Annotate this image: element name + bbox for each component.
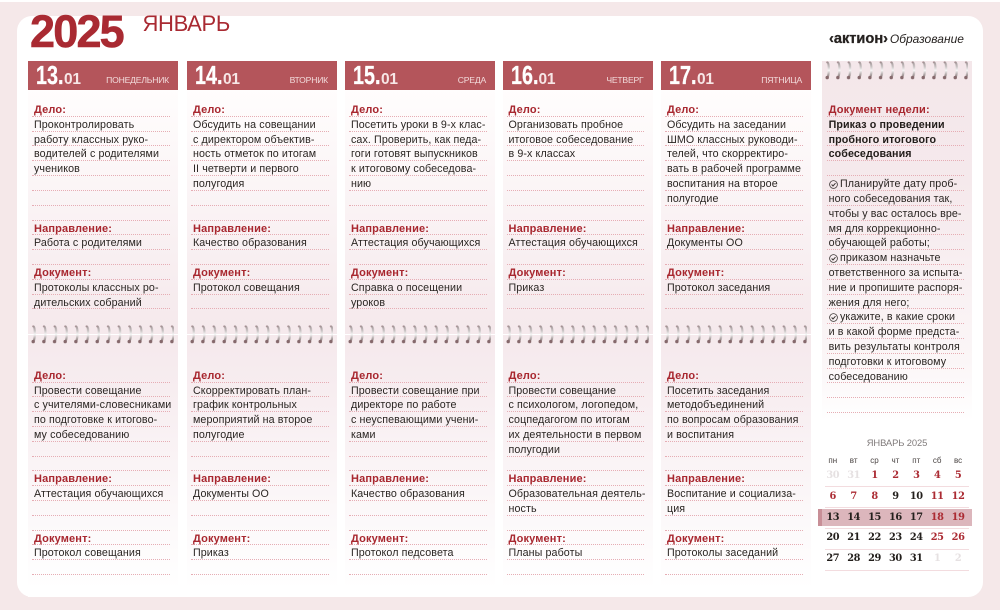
lower task card: Посетить заседания bbox=[667, 385, 769, 397]
calendar dates: 31 bbox=[910, 553, 923, 564]
upper task card: уроков bbox=[351, 297, 385, 309]
upper task card bbox=[32, 104, 170, 309]
lower task card: Направление: bbox=[351, 473, 429, 485]
calendar dates: 8 bbox=[871, 491, 878, 502]
calendar dates: 19 bbox=[952, 512, 964, 523]
upper task card: полугодие bbox=[667, 193, 718, 205]
upper task card: учеников bbox=[34, 163, 80, 175]
upper task card: сах. Проверить, как педа- bbox=[351, 134, 481, 146]
lower task card: методобъединений bbox=[667, 399, 764, 411]
lower task card: Документ: bbox=[34, 533, 91, 545]
calendar dates: 27 bbox=[826, 553, 839, 564]
calendar dates: 29 bbox=[868, 553, 881, 564]
date header: 13. bbox=[36, 60, 63, 90]
lower task card: мероприятий на второе bbox=[193, 414, 312, 426]
upper task card: Документ: bbox=[193, 267, 250, 279]
upper task card: телей, что скорректиро- bbox=[667, 148, 788, 160]
calendar title: ЯНВАРЬ 2025 bbox=[867, 437, 927, 448]
lower task card: по подготовке к итогово- bbox=[34, 414, 157, 426]
document of the week text: Приказ о проведении bbox=[829, 119, 945, 131]
calendar dates: 15 bbox=[868, 512, 881, 523]
calendar dates: 2 bbox=[892, 470, 899, 481]
lower task card: Провести совещание bbox=[34, 385, 142, 397]
calendar dates: 25 bbox=[931, 532, 944, 543]
weekday names: чт bbox=[891, 456, 899, 465]
upper task card: Документ: bbox=[667, 267, 724, 279]
document of the week text: обучающей работы; bbox=[829, 237, 930, 249]
upper task card: II четверти и первого bbox=[193, 163, 299, 175]
upper task card: в 9-х классах bbox=[508, 148, 575, 160]
lower task card bbox=[32, 370, 171, 575]
upper task card bbox=[349, 104, 487, 309]
ring binding bbox=[190, 325, 333, 344]
calendar dates: 3 bbox=[913, 470, 920, 481]
upper task card: вать в рабочей программе bbox=[667, 163, 801, 175]
document of the week text: чтобы у вас осталось вре- bbox=[829, 208, 962, 220]
upper task card: Дело: bbox=[508, 104, 541, 116]
calendar dates: 10 bbox=[910, 491, 923, 502]
ring binding bbox=[664, 325, 807, 344]
lower task card: Провести совещание при bbox=[351, 385, 480, 397]
upper task card: итоговое собеседование bbox=[508, 134, 633, 146]
upper task card: Дело: bbox=[193, 104, 225, 116]
upper task card: Посетить уроки в 9-х клас- bbox=[351, 119, 486, 131]
lower task card: Направление: bbox=[193, 473, 271, 485]
panel: document of the week bbox=[822, 61, 972, 421]
document of the week text: мя для коррекционно- bbox=[829, 222, 941, 234]
lower task card: Направление: bbox=[34, 473, 112, 485]
date header: 01 bbox=[223, 71, 240, 88]
upper task card: водителей с родителями bbox=[34, 148, 159, 160]
document of the week text bbox=[827, 104, 964, 413]
upper task card: Направление: bbox=[351, 222, 429, 234]
upper task card: Направление: bbox=[34, 222, 112, 234]
date header: 14. bbox=[195, 60, 222, 90]
document of the week text: и в какой форме предста- bbox=[829, 326, 959, 338]
date header: 01 bbox=[64, 71, 81, 88]
upper task card: работу классных руко- bbox=[34, 134, 148, 146]
lower task card: Протоколы заседаний bbox=[667, 547, 778, 559]
lower task card: полугодие bbox=[193, 429, 244, 441]
lower task card: му собеседованию bbox=[34, 429, 129, 441]
lower task card: Дело: bbox=[351, 370, 383, 382]
calendar dates: 18 bbox=[931, 512, 944, 523]
lower task card: Дело: bbox=[34, 370, 66, 382]
document of the week text: собеседования bbox=[829, 148, 912, 160]
date header bbox=[502, 61, 652, 90]
date header bbox=[345, 61, 495, 90]
document of the week text: ответственного за испыта- bbox=[829, 267, 963, 279]
lower task card: ция bbox=[667, 503, 685, 515]
upper task card: ШМО классных руководи- bbox=[667, 134, 798, 146]
panel: Tuesday 14.01 bbox=[187, 60, 337, 575]
calendar dates: 23 bbox=[889, 532, 902, 543]
ring binding bbox=[826, 61, 968, 80]
upper task card: Протокол совещания bbox=[193, 282, 300, 294]
upper task card: Протоколы классных ро- bbox=[34, 282, 159, 294]
calendar dates: 26 bbox=[952, 532, 964, 543]
lower task card: Скорректировать план- bbox=[193, 385, 311, 397]
date header: ПЯТНИЦА bbox=[761, 75, 802, 85]
weekday names: пн bbox=[828, 456, 837, 465]
weekday names: вс bbox=[954, 456, 962, 465]
calendar dates bbox=[826, 470, 964, 564]
date header: 15. bbox=[353, 60, 380, 90]
upper task card: Направление: bbox=[667, 222, 745, 234]
calendar dates: 1 bbox=[871, 470, 878, 481]
lower task card bbox=[349, 370, 487, 575]
lower task card: Аттестация обучающихся bbox=[34, 488, 163, 500]
lower task card: по вопросам образования bbox=[667, 414, 798, 426]
lower task card: Планы работы bbox=[508, 547, 582, 559]
lower task card bbox=[191, 370, 329, 575]
current week highlight bbox=[818, 509, 972, 526]
panel: Thursday 16.01 bbox=[503, 60, 653, 575]
upper task card bbox=[507, 104, 644, 309]
calendar dates: 7 bbox=[850, 491, 857, 502]
upper task card: Документ: bbox=[508, 267, 566, 279]
calendar dates: 30 bbox=[889, 553, 902, 564]
date header: 01 bbox=[697, 71, 714, 88]
upper task card: Обсудить на совещании bbox=[193, 119, 316, 131]
lower task card: Документ: bbox=[351, 533, 408, 545]
lower task card: ность bbox=[508, 503, 537, 515]
upper task card: ность отметок по итогам bbox=[193, 148, 316, 160]
upper task card bbox=[191, 104, 329, 309]
lower task card: Воспитание и социализа- bbox=[667, 488, 796, 500]
upper task card: нию bbox=[351, 178, 371, 190]
logo: Aktion Education: ‹актион› Образование bbox=[829, 31, 964, 47]
lower task card bbox=[507, 370, 646, 575]
date header bbox=[187, 61, 337, 90]
upper task card: Работа с родителями bbox=[34, 237, 142, 249]
panel: Friday 17.01 bbox=[661, 60, 811, 575]
lower task card: Дело: bbox=[667, 370, 699, 382]
lower task card: Документы ОО bbox=[193, 488, 269, 500]
ring binding bbox=[32, 325, 174, 344]
upper task card: Документы ОО bbox=[667, 237, 743, 249]
ring binding bbox=[348, 325, 491, 344]
calendar dates: 14 bbox=[847, 512, 860, 523]
calendar dates: 22 bbox=[868, 532, 881, 543]
date header: 01 bbox=[538, 71, 555, 88]
lower task card: Качество образования bbox=[351, 488, 465, 500]
upper task card: Документ: bbox=[351, 267, 408, 279]
date header bbox=[661, 61, 811, 90]
calendar dates: 30 bbox=[826, 470, 839, 481]
upper task card: Обсудить на заседании bbox=[667, 119, 786, 131]
upper task card bbox=[665, 104, 803, 309]
upper task card: гоги готовят выпускников bbox=[351, 148, 478, 160]
weekday names: вт bbox=[850, 456, 858, 465]
date header: ЧЕТВЕРГ bbox=[606, 75, 644, 85]
calendar dates: 5 bbox=[955, 470, 961, 481]
lower task card: Образовательная деятель- bbox=[508, 488, 646, 500]
lower task card: и воспитания bbox=[667, 429, 734, 441]
date header: 01 bbox=[381, 71, 398, 88]
lower task card: Протокол педсовета bbox=[351, 547, 454, 559]
lower task card: с неуспевающими учени- bbox=[351, 414, 478, 426]
lower task card: их деятельности в первом bbox=[508, 429, 642, 441]
document of the week text: ного собеседования так, bbox=[829, 193, 952, 205]
lower task card: Документ: bbox=[193, 533, 250, 545]
document of the week text: Документ недели: bbox=[829, 104, 930, 116]
upper task card: дительских собраний bbox=[34, 297, 142, 309]
upper task card: Приказ bbox=[508, 282, 544, 294]
upper task card: воспитания на второе bbox=[667, 178, 778, 190]
document of the week text: подготовки к итоговому bbox=[829, 356, 946, 368]
document of the week text: жения для него; bbox=[829, 297, 909, 309]
ring binding bbox=[506, 325, 649, 344]
calendar dates: 13 bbox=[826, 512, 839, 523]
panel: Monday 13.01 bbox=[28, 60, 178, 597]
date header: 16. bbox=[510, 60, 538, 90]
document of the week text: собеседованию bbox=[829, 371, 908, 383]
weekday names bbox=[828, 456, 962, 465]
calendar dates: 11 bbox=[931, 491, 944, 502]
upper task card: Проконтролировать bbox=[34, 119, 134, 131]
panel: Wednesday 15.01 bbox=[345, 60, 495, 575]
calendar dates: 1 bbox=[934, 553, 940, 564]
lower task card: директоре по работе bbox=[351, 399, 456, 411]
upper task card: Документ: bbox=[34, 267, 91, 279]
lower task card: Приказ bbox=[193, 547, 229, 559]
upper task card: Качество образования bbox=[193, 237, 307, 249]
weekday names: ср bbox=[870, 456, 879, 465]
lower task card: Дело: bbox=[508, 370, 541, 382]
upper task card: Организовать пробное bbox=[508, 119, 623, 131]
upper task card: Аттестация обучающихся bbox=[508, 237, 638, 249]
document of the week text: вить результаты контроля bbox=[829, 341, 960, 353]
calendar dates: 21 bbox=[847, 532, 860, 543]
title: 2025: 2025 bbox=[30, 6, 123, 57]
calendar dates: 17 bbox=[910, 512, 923, 523]
weekday names: пт bbox=[912, 456, 920, 465]
lower task card: соцпедагогом по итогам bbox=[508, 414, 630, 426]
upper task card: с директором объектив- bbox=[193, 134, 315, 146]
upper task card: к итоговому собеседова- bbox=[351, 163, 476, 175]
document of the week text: укажите, в какие сроки bbox=[840, 311, 955, 323]
upper task card: Справка о посещении bbox=[351, 282, 462, 294]
lower task card: ками bbox=[351, 429, 376, 441]
lower task card: график контрольных bbox=[193, 399, 297, 411]
weekday names: сб bbox=[933, 456, 941, 465]
upper task card: Дело: bbox=[667, 104, 699, 116]
lower task card: Протокол совещания bbox=[34, 547, 141, 559]
date header: ПОНЕДЕЛЬНИК bbox=[106, 75, 169, 85]
document of the week text: ние и пропишите распоря- bbox=[829, 282, 963, 294]
calendar dates: 4 bbox=[934, 470, 940, 481]
document of the week text: пробного итогового bbox=[829, 134, 936, 146]
lower task card: полугодии bbox=[508, 444, 560, 456]
upper task card: Направление: bbox=[193, 222, 271, 234]
calendar dates: 2 bbox=[955, 553, 961, 564]
document of the week text: Планируйте дату проб- bbox=[840, 178, 957, 190]
document of the week text: приказом назначьте bbox=[840, 252, 941, 264]
date header: ВТОРНИК bbox=[290, 75, 328, 85]
date header: 17. bbox=[669, 60, 696, 90]
lower task card: Дело: bbox=[193, 370, 225, 382]
lower task card: с психологом, логопедом, bbox=[508, 399, 638, 411]
upper task card: Протокол заседания bbox=[667, 282, 770, 294]
upper task card: Направление: bbox=[508, 222, 587, 234]
lower task card: Направление: bbox=[508, 473, 587, 485]
lower task card: Документ: bbox=[667, 533, 724, 545]
calendar dates: 20 bbox=[826, 532, 839, 543]
upper task card: Дело: bbox=[351, 104, 383, 116]
upper task card: полугодия bbox=[193, 178, 244, 190]
lower task card: Документ: bbox=[508, 533, 566, 545]
calendar dates: 6 bbox=[830, 491, 836, 502]
lower task card: Направление: bbox=[667, 473, 745, 485]
calendar dates: 16 bbox=[889, 512, 902, 523]
calendar dates: 12 bbox=[952, 491, 964, 502]
calendar dates: 28 bbox=[847, 553, 860, 564]
lower task card: с учителями-словесниками bbox=[34, 399, 171, 411]
upper task card: Дело: bbox=[34, 104, 66, 116]
heading: month: ЯНВАРЬ bbox=[142, 11, 230, 36]
lower task card: Провести совещание bbox=[508, 385, 616, 397]
calendar dates: 31 bbox=[847, 470, 860, 481]
upper task card: Аттестация обучающихся bbox=[351, 237, 480, 249]
lower task card bbox=[665, 370, 803, 575]
calendar dates: 24 bbox=[910, 532, 923, 543]
date header: СРЕДА bbox=[458, 75, 486, 85]
date header bbox=[28, 61, 178, 90]
calendar dates: 9 bbox=[892, 491, 899, 502]
